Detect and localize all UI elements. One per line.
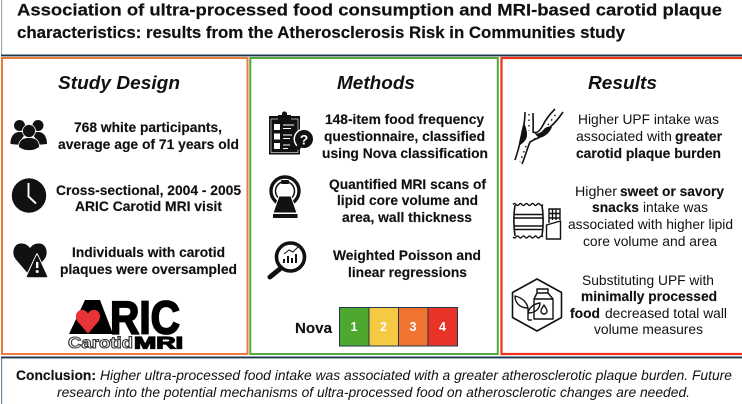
nova scale [340, 308, 458, 346]
nova scale: 1 [351, 320, 358, 334]
title: Association of ultra-processed food consumption and MRI-based carotid plaque [17, 0, 722, 19]
text: minimally processed food: minimally processed [581, 289, 717, 304]
text: participants: average age of 71 years old [58, 137, 239, 152]
text: MRI scans: area, wall thickness [342, 210, 472, 225]
panel: methods [250, 58, 498, 354]
text: minimally processed food: volume measures [594, 322, 703, 337]
icon: artery with plaque [515, 109, 563, 164]
panel: results [502, 58, 742, 354]
conclusion: Higher ultra-processed food intake was associated with a greater atherosclerotic plaque burden. Future [100, 368, 732, 383]
logo: ARIC Carotid MRI: Carotid [68, 335, 133, 352]
icon: plant and milk carton in hexagon [512, 279, 562, 331]
logo: ARIC Carotid MRI [66, 291, 184, 352]
text: MRI scans: lipid core volume and [337, 193, 478, 208]
logo: ARIC Carotid MRI: A [70, 291, 112, 344]
nova scale: 4 [439, 320, 446, 334]
icon: clipboard with question [269, 111, 314, 154]
text: snacks: intake was [643, 200, 708, 215]
heading: study design: Study Design [58, 72, 180, 93]
text: food frequency questionnaire: using Nova classification [322, 146, 488, 161]
text: food frequency questionnaire: 148-item food frequency [325, 112, 484, 127]
text: regressions: linear regressions [348, 265, 467, 280]
heading: methods: Methods [337, 72, 415, 93]
conclusion [16, 368, 732, 400]
text: regressions [333, 248, 481, 280]
text: participants [58, 120, 239, 152]
text: cross-sectional [56, 183, 241, 214]
text: MRI scans [329, 177, 486, 225]
text: participants: 768 white participants, [74, 120, 222, 135]
icon: clipboard with question: ? [300, 132, 308, 148]
icon: heart warning [13, 243, 48, 277]
icon: magnifier with chart [270, 243, 304, 277]
text: plaque burden [576, 112, 723, 161]
icon: clock [12, 178, 46, 213]
text: oversampled: Individuals with carotid [72, 245, 225, 260]
icon: MRI scanner [271, 177, 299, 218]
text: snacks: Higher [575, 184, 617, 199]
text: food frequency questionnaire [322, 112, 488, 161]
title [17, 0, 722, 42]
text: MRI scans: Quantified MRI scans of [329, 177, 486, 192]
text: snacks: core volume and area [583, 234, 717, 249]
logo: ARIC Carotid MRI: MRI [134, 334, 183, 352]
conclusion: Conclusion: [16, 368, 96, 383]
icon: people [10, 120, 47, 150]
text: minimally processed food: decreased total wall [605, 306, 727, 321]
text: snacks: sweet or savory [620, 184, 724, 199]
text: minimally processed food [570, 273, 727, 337]
text: minimally processed food: Substituting UPF with [582, 273, 714, 288]
logo: ARIC Carotid MRI: RIC [110, 292, 180, 344]
label: Nova: Nova [295, 321, 333, 337]
text: cross-sectional: Cross-sectional, 2004 - 2005 [56, 183, 241, 198]
conclusion: research into the potential mechanisms of ultra-processed food on atherosclerotic changes are needed. [57, 385, 690, 400]
text: cross-sectional: ARIC Carotid MRI visit [75, 199, 222, 214]
text: plaque burden: carotid plaque burden [576, 146, 721, 161]
text: plaque burden: associated with [576, 129, 672, 144]
text: plaque burden: greater [675, 129, 723, 144]
text: minimally processed food: food [570, 306, 600, 321]
text: food frequency questionnaire: questionnaire, classified [324, 129, 485, 144]
text: plaque burden: Higher UPF intake was [578, 112, 719, 127]
text: oversampled [60, 245, 237, 277]
title: characteristics: results from the Atherosclerosis Risk in Communities study [17, 23, 626, 42]
text: snacks: associated with higher lipid [568, 217, 733, 232]
text: regressions: Weighted Poisson and [333, 248, 481, 263]
text: snacks [568, 184, 733, 249]
icon: snacks [513, 204, 560, 239]
text: snacks: snacks [592, 200, 639, 215]
heading: results: Results [588, 72, 657, 93]
text: oversampled: plaques were oversampled [60, 262, 237, 277]
nova scale: 3 [410, 320, 417, 334]
nova scale: 2 [380, 320, 387, 334]
panel: study design [2, 58, 248, 354]
